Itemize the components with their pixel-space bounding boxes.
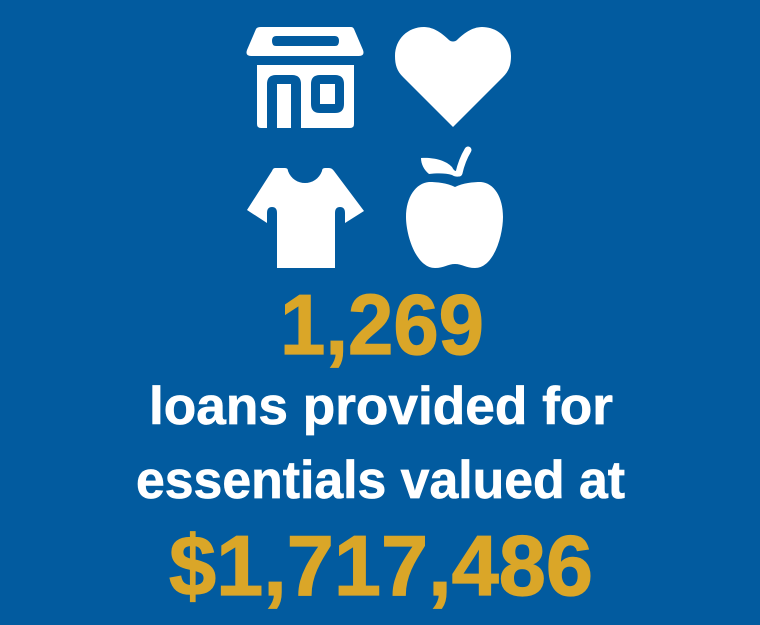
icon: heart: [395, 27, 511, 127]
stat: number of loans: 1,269: [280, 278, 484, 373]
icon: apple: [406, 150, 503, 268]
icon: t-shirt: [247, 168, 364, 268]
stat: total value: $1,717,486: [169, 519, 593, 614]
icon: storefront: [246, 27, 364, 128]
text: loans provided for: loans provided for: [149, 377, 613, 436]
text: essentials valued at: essentials valued at: [136, 451, 625, 510]
